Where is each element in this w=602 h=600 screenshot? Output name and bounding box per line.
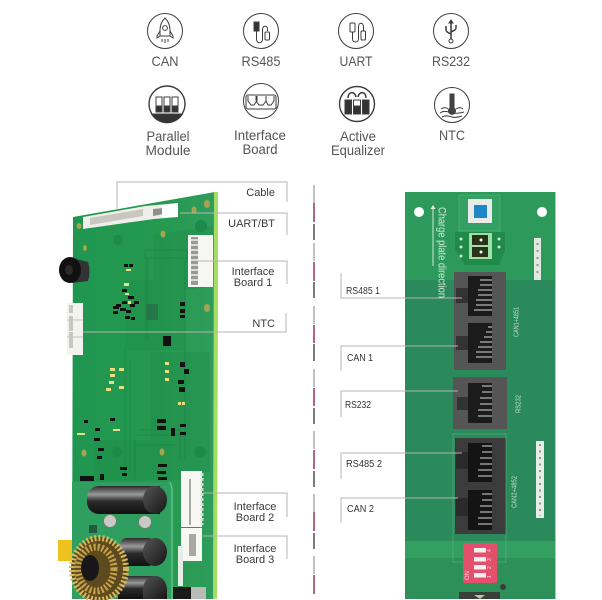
DIP switch: 1 — [487, 575, 493, 578]
label: Interface Board 2: Board 2 — [236, 512, 274, 524]
label: Parallel Module: Module — [146, 142, 191, 158]
icon: active equalizer — [340, 86, 374, 122]
label: NTC: NTC — [439, 127, 465, 143]
buzzer — [59, 257, 90, 283]
DIP switch: ON — [465, 571, 471, 580]
silk: CAN1+4851: CAN1+4851 — [514, 307, 520, 337]
terminal block — [455, 232, 505, 265]
silk outline — [453, 434, 506, 562]
icon: interface board — [244, 84, 278, 118]
icon: NTC thermometer — [434, 88, 470, 122]
direction arrow — [430, 205, 436, 266]
screws — [104, 514, 152, 528]
label: Interface Board 2: Interface — [234, 501, 276, 513]
icon: UART cable — [338, 14, 374, 48]
label: Active Equalizer: Active — [340, 128, 376, 144]
RJ45 double CAN2 RS485 2 — [455, 438, 506, 534]
label: CAN 2: CAN 2 — [347, 504, 374, 515]
DIP switch — [463, 543, 497, 583]
small components — [80, 264, 189, 481]
interface board 2 connector — [181, 471, 202, 527]
icon: RS485 cable — [244, 14, 278, 48]
callout leader lines right — [341, 273, 462, 523]
label: Interface Board: Interface — [234, 127, 286, 143]
label: NTC: NTC — [252, 318, 275, 330]
icon row one — [148, 14, 470, 69]
pin header top — [534, 238, 541, 280]
label: UART/BT: UART/BT — [228, 218, 275, 230]
label: Interface Board: Board — [242, 141, 278, 157]
NTC connector — [67, 303, 83, 355]
label: Interface Board 1: Board 1 — [234, 277, 272, 289]
label: Interface Board 3: Interface — [234, 543, 276, 555]
switch — [459, 195, 500, 231]
icon: parallel module — [149, 86, 185, 123]
capacitor sub-board — [58, 482, 172, 600]
callout labels left — [228, 187, 276, 566]
label: UART: UART — [340, 53, 373, 69]
top cable connector — [83, 203, 178, 229]
bottom connector — [459, 584, 506, 599]
label: RS485 2: RS485 2 — [346, 459, 382, 470]
label: CAN: CAN — [152, 53, 178, 69]
interface board 3 connector — [178, 528, 202, 586]
panel: left circuit board — [58, 192, 218, 600]
board body — [405, 192, 556, 599]
capacitors — [87, 486, 167, 599]
RJ45 RS232 — [453, 377, 507, 429]
black power socket — [173, 587, 206, 599]
label: Active Equalizer: Equalizer — [331, 142, 385, 158]
label: Interface Board 3: Board 3 — [236, 554, 274, 566]
pin header lower — [536, 441, 544, 518]
label: RS232: RS232 — [432, 53, 470, 69]
silk: CAN2+4852: CAN2+4852 — [512, 476, 518, 508]
label: RS485: RS485 — [242, 53, 281, 69]
silk: RS232: RS232 — [516, 395, 522, 413]
DIP switch: 2 — [487, 566, 493, 569]
callout leader lines left — [83, 182, 287, 559]
DIP switch: 3 — [487, 558, 493, 561]
interface board 1 connector — [188, 235, 213, 287]
mounting holes — [76, 200, 210, 456]
yellow tab — [58, 540, 72, 561]
icon: CAN rocket — [148, 14, 182, 48]
icon: RS232 USB — [434, 14, 468, 48]
label: Cable: Cable — [246, 187, 275, 199]
mounting holes — [414, 207, 547, 217]
callout labels right — [345, 286, 382, 515]
label: Interface Board 1: Interface — [232, 266, 274, 278]
label: RS232: RS232 — [345, 400, 371, 411]
label: Parallel Module: Parallel — [146, 128, 190, 144]
direction text: Charge plate direction — [436, 207, 448, 298]
label: RS485 1: RS485 1 — [346, 286, 380, 297]
panel: right circuit board — [405, 192, 556, 599]
board body — [72, 192, 215, 599]
RJ45 double CAN1 RS485 1 — [454, 272, 506, 370]
label: CAN 1: CAN 1 — [347, 353, 373, 364]
icon row two — [146, 84, 470, 158]
DIP switch: 4 — [487, 549, 493, 552]
silk labels — [512, 307, 522, 508]
toroid inductor — [71, 537, 127, 600]
